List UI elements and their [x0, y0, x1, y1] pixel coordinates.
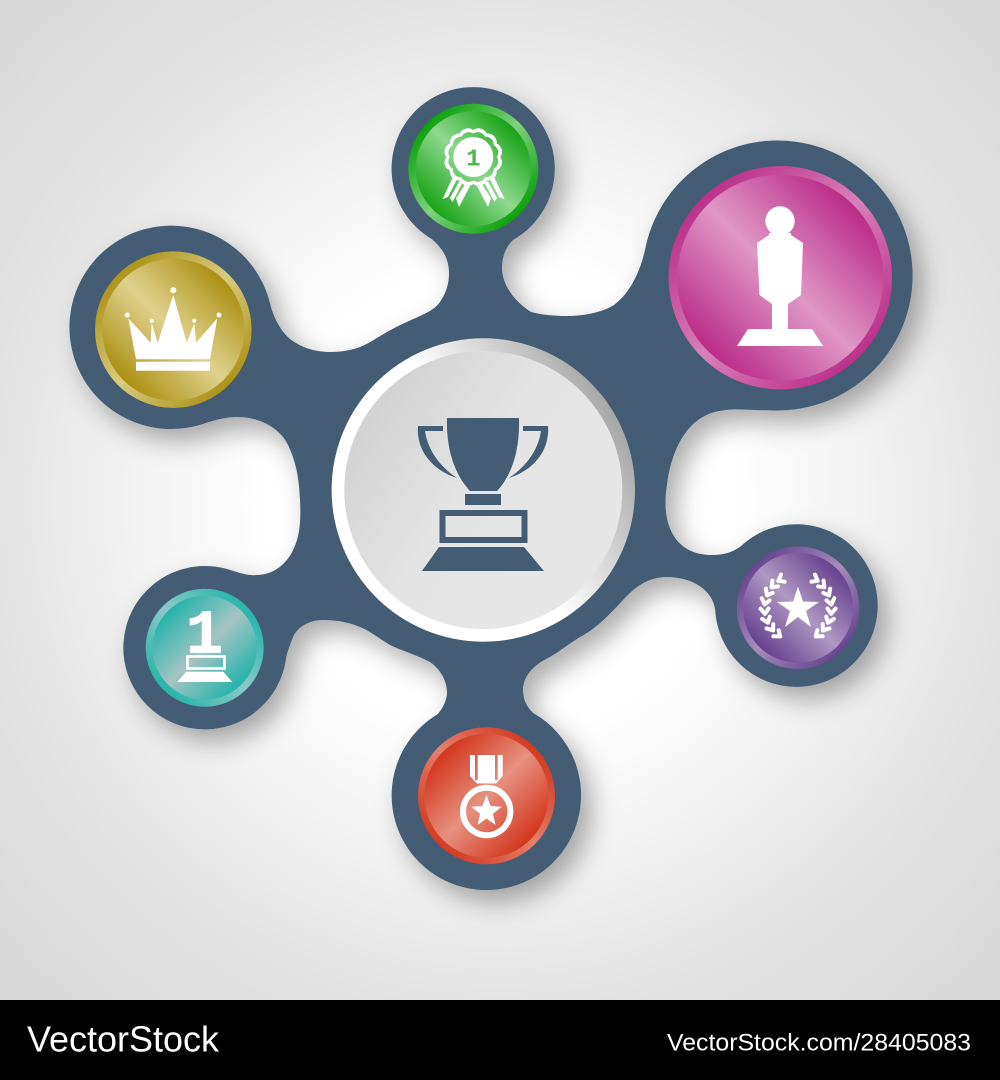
center circle with trophy	[332, 338, 635, 642]
pink button	[669, 166, 892, 389]
icon: crown	[125, 287, 222, 371]
icon: trophy	[418, 418, 548, 571]
icon: silhouette target	[737, 206, 823, 346]
footer bar	[0, 1000, 1000, 1080]
green button	[408, 104, 538, 234]
icon: medal	[463, 755, 510, 835]
icon: star with laurel	[760, 575, 836, 636]
gold button	[95, 251, 252, 408]
footer brand text: VectorStock	[27, 1018, 220, 1060]
teal button	[146, 589, 264, 707]
icon: rosette ribbon: 1	[466, 146, 481, 174]
connected blob shape	[69, 87, 913, 890]
footer image id text: VectorStock.com/28405083	[667, 1030, 971, 1056]
icon: number one pedestal: 1	[186, 601, 223, 672]
purple button	[737, 546, 859, 669]
red button	[418, 727, 555, 864]
